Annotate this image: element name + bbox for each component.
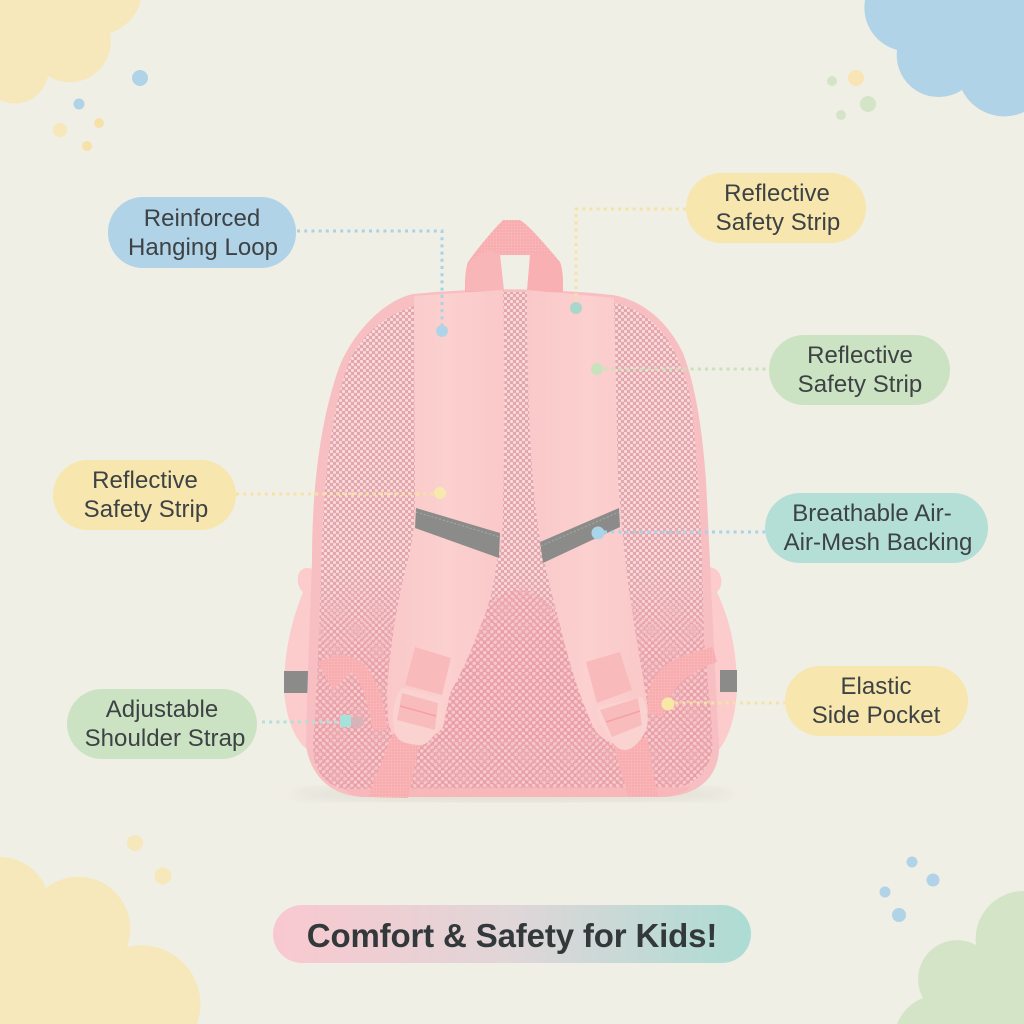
cloud: bottom left [0,857,200,1024]
callout: reflective safety strip left: Reflective [92,467,198,494]
reflective strip: right [540,508,620,563]
callout: breathable air-mesh backing: Air-Mesh Backing [784,529,972,556]
right buckle [597,697,648,750]
left webbing loop [318,655,388,730]
callout: reflective safety strip left [53,460,446,530]
callout: reinforced hanging loop: Hanging Loop [128,234,278,261]
right adjuster tab [586,652,632,703]
left adjuster tab [405,647,451,695]
callout: adjustable shoulder strap: Shoulder Strap [85,725,245,752]
confetti dots: top left [53,70,148,151]
title banner: Comfort & Safety for Kids! [307,917,717,954]
callout: elastic side pocket: Elastic [840,673,912,700]
right webbing loop [648,647,717,717]
left shoulder strap [387,290,504,742]
callout: reinforced hanging loop [108,197,448,337]
reflective strip: left [415,508,500,558]
left lower strap [368,733,420,798]
callout: breathable air-mesh backing: Breathable Air- [792,500,952,527]
confetti dots: bottom left [127,835,172,884]
side pocket: right [695,567,737,755]
cloud: bottom right [897,891,1024,1024]
cloud: top right [864,0,1024,116]
title banner [273,905,751,963]
confetti dots: top right [827,70,876,120]
callout: reflective safety strip green: Reflective [807,342,913,369]
callout: breathable air-mesh backing [592,493,988,563]
side pocket: left [284,568,326,752]
callout: elastic side pocket: Side Pocket [812,702,941,729]
callout: reflective safety strip green [591,335,950,405]
callout: reflective safety strip left: Safety Strip [84,496,208,523]
hanging loop [465,220,563,292]
backpack [284,220,737,801]
left buckle [393,688,443,745]
callout: reflective safety strip green: Safety Strip [798,371,922,398]
callout: reflective safety strip top: Safety Strip [716,209,840,236]
callout: reflective safety strip top [570,173,866,314]
callout: reinforced hanging loop: Reinforced [144,205,260,232]
callout: reflective safety strip top: Reflective [724,180,830,207]
cloud: top left [0,0,141,104]
backpack body [306,289,719,797]
right shoulder strap [527,290,648,745]
lower mesh pad [313,584,712,789]
mesh back panel [313,292,712,790]
right lower strap [613,737,658,797]
callout: adjustable shoulder strap [67,689,364,759]
callout: elastic side pocket [662,666,968,736]
confetti dots: bottom right [880,856,940,922]
callout: adjustable shoulder strap: Adjustable [106,696,218,723]
ground shadow [290,787,734,801]
bottom trim [345,787,692,797]
